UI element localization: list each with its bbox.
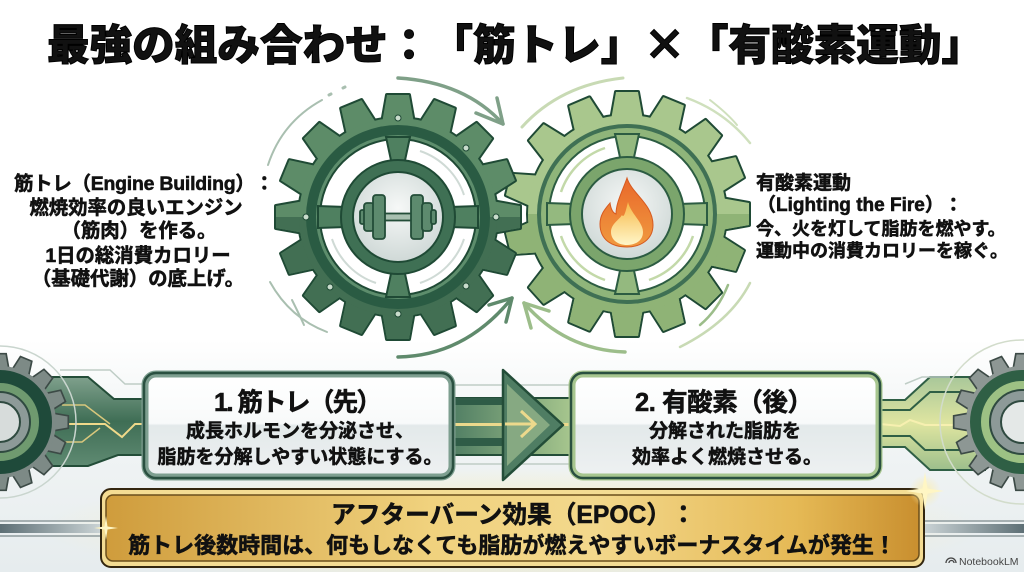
text block: cardio description — [756, 172, 1008, 261]
text block: cardio description: 運動中の消費カロリーを稼ぐ。 — [756, 241, 1008, 261]
arrow between steps — [503, 370, 563, 480]
step 1 box: 1. 筋トレ（先） — [214, 389, 382, 417]
step 2 box: 効率よく燃焼させる。 — [632, 446, 822, 468]
gold glow — [42, 468, 982, 572]
text block: muscle training description — [14, 173, 274, 290]
side rails — [0, 521, 1024, 536]
step 1 box — [144, 373, 453, 478]
gear: small right — [940, 340, 1024, 504]
callout: afterburn effect — [101, 489, 924, 567]
sparkle: gold box top right — [906, 472, 944, 510]
callout: afterburn effect: 筋トレ後数時間は、何もしなくても脂肪が燃えやすいボーナスタイムが発生！ — [128, 533, 896, 558]
circular motion arrows — [268, 78, 750, 357]
icon: flame — [582, 169, 672, 259]
text block: muscle training description: （基礎代謝）の底上げ。 — [32, 267, 244, 290]
text block: muscle training description: 燃焼効率の良いエンジン — [29, 197, 243, 219]
step 2 box: 2. 有酸素（後） — [635, 389, 813, 417]
power rail: right — [875, 377, 985, 470]
callout: afterburn effect: アフターバーン効果（EPOC）： — [331, 501, 696, 529]
gear: small left — [0, 346, 76, 498]
step 2 box: 分解された脂肪を — [649, 420, 801, 442]
text block: muscle training description: 筋トレ（Engine Building）： — [14, 173, 274, 195]
text block: muscle training description: （筋肉）を作る。 — [61, 220, 217, 242]
text block: cardio description: 有酸素運動 — [756, 172, 851, 194]
icon: dumbbell — [353, 172, 443, 262]
text block: cardio description: 今、火を灯して脂肪を燃やす。 — [756, 218, 1006, 239]
power rail: middle — [450, 385, 575, 464]
step 1 box: 成長ホルモンを分泌させ、 — [186, 419, 414, 442]
sparkle: gold box left — [94, 516, 118, 540]
text block: muscle training description: 1日の総消費カロリー — [45, 245, 231, 267]
gear: muscle training (dumbbell) — [276, 95, 520, 339]
step 1 box: 脂肪を分解しやすい状態にする。 — [157, 445, 443, 468]
title: 最強の組み合わせ：「筋トレ」×「有酸素運動」 — [47, 12, 984, 73]
text block: cardio description: （Lighting the Fire）： — [757, 194, 963, 216]
gear: cardio (flame) — [505, 92, 749, 336]
power rail: left — [40, 370, 150, 466]
watermark: NotebookLM: NotebookLM — [959, 556, 1019, 568]
step 2 box — [571, 373, 880, 478]
